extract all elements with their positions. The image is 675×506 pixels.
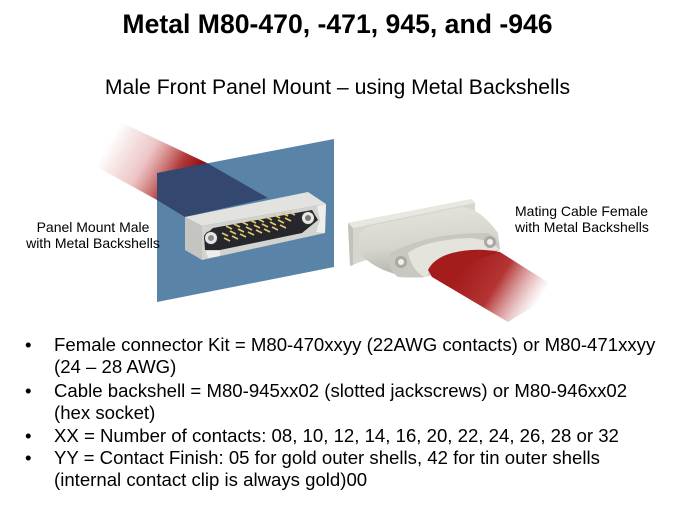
label: panel mount male [26,219,160,251]
cable behind panel [157,163,268,217]
right cable [428,252,560,322]
bullet list: (hex socket) [54,402,155,423]
left cable [97,117,207,200]
label: panel mount male: with Metal Backshells [26,235,160,251]
label: mating cable female: with Metal Backshells [515,219,649,235]
pins [222,212,295,241]
title: Metal M80-470, -471, 945, and -946 [122,9,553,39]
label: mating cable female: Mating Cable Female [515,203,648,219]
label: panel mount male: Panel Mount Male [37,219,149,235]
bullet list: • [25,425,32,446]
bullet list: Female connector Kit = M80-470xxyy (22AWG contacts) or M80-471xxyy [54,334,655,355]
bullet list: Cable backshell = M80-945xx02 (slotted jackscrews) or M80-946xx02 [54,380,627,401]
bullet list: XX = Number of contacts: 08, 10, 12, 14, 16, 20, 22, 24, 26, 28 or 32 [54,425,619,446]
bullet list: • [25,447,32,468]
bullet list: • [25,380,32,401]
panel mount male connector [185,192,326,260]
subtitle: Male Front Panel Mount – using Metal Backshells [105,76,570,99]
bullet list: (24 – 28 AWG) [54,356,176,377]
mating cable female connector [348,199,500,278]
bullet list: (internal contact clip is always gold)00 [54,469,367,490]
bullet list: • [25,334,32,355]
blue panel [157,139,334,302]
label: mating cable female [515,203,649,235]
bullet list: YY = Contact Finish: 05 for gold outer shells, 42 for tin outer shells [54,447,600,468]
